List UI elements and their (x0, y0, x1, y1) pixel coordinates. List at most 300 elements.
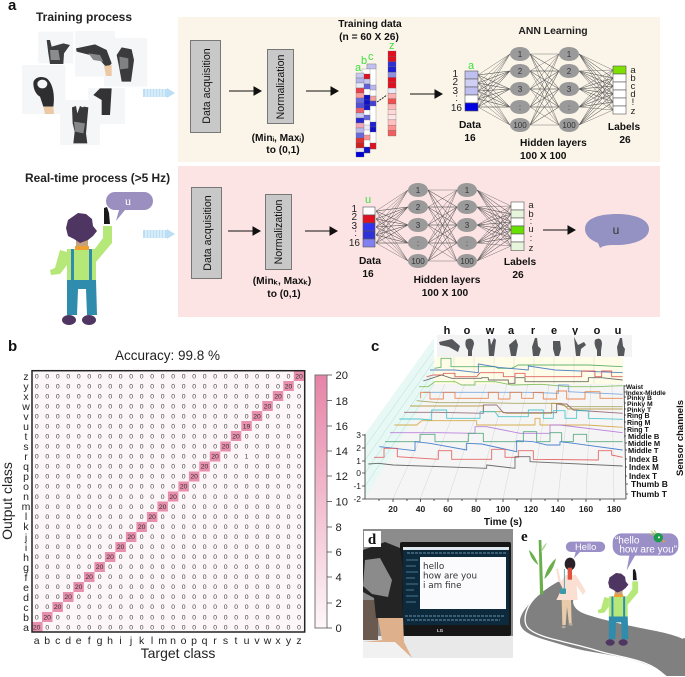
axis title: target class: Target class (141, 645, 215, 661)
x axis values (388, 504, 621, 514)
matrix diagonal values: 20 (222, 444, 229, 451)
output letters (528, 200, 534, 254)
heading: accuracy: Accuracy: 99.8 % (115, 348, 220, 363)
hidden layer nodes: : (519, 103, 521, 112)
matrix zero cells: 00 (35, 604, 56, 611)
output letters: ! (632, 97, 634, 108)
panel label d: d (368, 532, 377, 548)
matrix diagonal values: 20 (159, 504, 167, 511)
network connections (478, 54, 613, 125)
box: normalization (266, 194, 292, 270)
box: normalization (268, 50, 294, 124)
matrix zero cells: 00000000000000000000 (98, 574, 308, 581)
gesture letters: w (485, 325, 495, 337)
colour bar: 2 (336, 598, 342, 610)
output class letters: o (23, 481, 29, 493)
output class letters: i (25, 542, 27, 554)
sensor channel labels: Pinky M (627, 401, 653, 408)
speech bubble: hello (566, 542, 605, 558)
output letters: a (528, 200, 534, 211)
matrix zero cells: 000000000000000000000000 (35, 383, 287, 390)
input indices: 1 (452, 69, 458, 80)
chart axes (362, 385, 628, 502)
hidden layer nodes: 100 (411, 257, 425, 266)
screen text (423, 562, 477, 591)
screen text: how are you (423, 572, 477, 582)
matrix zero cells: 00000000000000 (35, 484, 182, 491)
x axis values: 80 (471, 504, 481, 514)
box: data acquisition (192, 188, 222, 278)
matrix frame (32, 371, 305, 632)
input indices: : (354, 228, 357, 239)
arrow: acquisition to normalization (228, 227, 260, 235)
colour bar: 6 (336, 547, 342, 559)
matrix zero cells: 00000000000000000000000 (66, 604, 308, 611)
matrix diagonal values: 20 (274, 393, 282, 400)
input letter a: a (468, 60, 475, 72)
heading: training data: Training data (338, 19, 402, 30)
matrix zero cells: 000 (276, 403, 308, 410)
output class letters: y (23, 381, 29, 393)
text: min max range: to (0,1) (266, 145, 300, 156)
output class letters (21, 371, 31, 634)
speech bubble: hello how are you (613, 533, 678, 570)
x axis values: 160 (579, 504, 593, 514)
output class letters: d (23, 592, 29, 604)
output class letters: z (23, 371, 29, 383)
matrix zero cells: 0000000 (35, 554, 108, 561)
output labels column (613, 66, 626, 114)
box: data acquisition (190, 40, 220, 132)
output class letters: r (24, 451, 28, 463)
matrix zero cells: 000000000000000 (150, 524, 308, 531)
speech bubble: hello how are you: how are you” (619, 544, 677, 555)
label: hidden layers: Hidden layers (414, 275, 481, 286)
matrix zero cells: 000000000000 (35, 504, 161, 511)
matrix diagonal values: 20 (43, 614, 51, 621)
chart walls and floor (365, 335, 632, 499)
output letters: b (528, 209, 534, 220)
matrix zero cells: 00000000000000000000000 (35, 393, 276, 400)
output class letters: k (23, 521, 29, 533)
y axis values: 2 (356, 443, 361, 453)
matrix zero cells: 0 (35, 614, 45, 621)
arrow: labels to output (543, 226, 575, 234)
x axis title: Time (s) (484, 517, 522, 528)
matrix zero cells: 000000000000000000 (119, 554, 308, 561)
colour bar: 8 (336, 522, 342, 534)
matrix diagonal values: 20 (33, 624, 41, 631)
input indices (451, 69, 462, 114)
y axis values (353, 430, 361, 504)
matrix zero cells: 00000000000000000 (35, 454, 213, 461)
sensor channel labels: Middle T (628, 446, 659, 455)
label: data 16: Data (359, 256, 381, 267)
screen text: i am fine (423, 581, 462, 591)
hidden layer nodes: 1 (567, 50, 572, 59)
road (520, 582, 685, 676)
matrix zero cells: 0000000000000000000 (35, 434, 234, 440)
matrix zero cells: 0000 (266, 414, 308, 420)
output labels column (511, 202, 524, 250)
output letters (630, 65, 636, 117)
matrix diagonal values: 20 (232, 434, 240, 440)
label: labels 26: Labels (608, 122, 640, 133)
colour bar: 10 (336, 496, 348, 508)
matrix diagonal values: 20 (295, 373, 303, 380)
text: min max range (252, 133, 304, 156)
matrix diagonal values (33, 373, 303, 631)
matrix zero cells: 0000000000000 (171, 504, 308, 511)
box: data acquisition: Data acquisition (202, 195, 214, 271)
text: min max range: to (0,1) (267, 289, 301, 300)
matrix zero cells: 000000 (35, 564, 98, 571)
gesture letters: o (464, 325, 471, 337)
matrix zero cells: 0000000000000000000000000 (45, 624, 308, 631)
input data column (363, 207, 375, 247)
arrow: realtime data flow (143, 229, 175, 239)
matrix zero cells: 00000 (255, 424, 308, 430)
panel: real-time pipeline (178, 166, 660, 317)
hidden layer nodes: : (568, 103, 570, 112)
hidden layer nodes: 2 (465, 203, 470, 212)
output class letters: w (21, 401, 30, 413)
x axis values: 100 (496, 504, 510, 514)
person with glove (598, 569, 638, 646)
hidden layer nodes: 3 (465, 221, 470, 230)
output class letters: v (23, 411, 29, 423)
matrix zero cells: 0000000000 (35, 524, 140, 531)
sensor channel labels: Waist (626, 384, 644, 391)
x axis values: 120 (524, 504, 538, 514)
matrix diagonal values: 20 (180, 484, 188, 491)
hidden layer nodes: : (466, 239, 468, 248)
input data column (465, 71, 478, 111)
output class letters: c (23, 602, 29, 614)
road and bamboo and woman (520, 530, 685, 676)
arrow: normalization to training data (306, 87, 338, 95)
hidden layer nodes (408, 183, 477, 268)
dotted connector (377, 95, 387, 102)
column letters a b c z (355, 40, 394, 74)
matrix diagonal values: 20 (169, 494, 177, 501)
output letters: c (631, 81, 636, 92)
sensor channel labels: Pinky B (627, 395, 652, 402)
matrix diagonal values: 20 (127, 534, 135, 541)
matrix zero cells: 0 (297, 383, 308, 390)
output class letters: t (25, 431, 28, 443)
colour bar: 18 (336, 396, 348, 408)
matrix diagonal values: 20 (138, 524, 146, 531)
matrix diagonal values: 20 (106, 554, 114, 561)
arrow: normalization to network (305, 227, 337, 235)
gesture letters: o (594, 325, 601, 337)
speech bubble: u (106, 192, 153, 221)
input indices (349, 204, 360, 249)
sensor channel labels: Index B (629, 455, 658, 464)
label: labels 26 (504, 257, 536, 281)
output letters: u (528, 224, 534, 235)
output class letters: q (23, 461, 29, 473)
panel e: street scene (520, 529, 685, 676)
input indices: : (455, 93, 458, 104)
sensor channel labels: Index-Middle (626, 390, 666, 397)
label: data 16: 16 (464, 133, 476, 144)
column letters a b c z: z (389, 40, 394, 52)
hidden layer nodes: 100 (513, 121, 527, 130)
box: data acquisition: Data acquisition (201, 48, 213, 124)
matrix zero cells: 00000000 (35, 544, 119, 551)
y axis values: 1 (356, 456, 361, 466)
output bubble: u (585, 214, 649, 248)
heading: real-time process: Real-time process (>5 Hz) (25, 171, 170, 185)
matrix diagonal values: 20 (64, 594, 72, 601)
confusion matrix (32, 371, 308, 632)
sensor channel labels: Index T (629, 472, 657, 481)
panel label d (364, 531, 381, 548)
matrix diagonal values: 20 (264, 403, 271, 410)
output class letters: l (25, 511, 27, 523)
matrix diagonal values: 20 (96, 564, 104, 571)
matrix zero cells: 00000000000000000000 (35, 424, 245, 430)
panel d: laptop photo (363, 529, 513, 658)
woman (556, 558, 586, 628)
label: data 16 (359, 256, 381, 280)
heading: training data: (n = 60 X 26) (339, 32, 399, 43)
x axis values: 20 (388, 504, 398, 514)
text: min max range: (Minᵢ, Maxᵢ) (252, 133, 304, 144)
panel label b: b (8, 338, 17, 355)
label: hidden layers (414, 275, 481, 299)
heading: training process: Training process (36, 10, 132, 24)
sensor channel labels: Ring T (627, 427, 649, 434)
speech bubble: hello: Hello (575, 542, 596, 552)
gesture letters: y (572, 325, 579, 337)
matrix zero cells: 0000000000000000000000 (35, 403, 266, 410)
matrix zero cells: 000000000000000000 (35, 444, 224, 451)
matrix diagonal values: 20 (285, 383, 292, 390)
heading: ANN learning: ANN Learning (518, 26, 588, 37)
bamboo (529, 540, 556, 594)
output bubble: u: u (613, 223, 619, 237)
gesture photo icons (439, 337, 625, 356)
label: data 16: 16 (362, 269, 374, 280)
matrix zero cells: 00000000000000000 (129, 544, 308, 551)
x axis values: 180 (607, 504, 621, 514)
output letters: z (529, 243, 534, 254)
gesture letters: r (531, 325, 536, 337)
photo collage: glove gestures (22, 31, 147, 145)
hidden layer nodes: 3 (567, 85, 572, 94)
hidden layer nodes: 100 (460, 257, 474, 266)
hidden layer nodes: 1 (518, 50, 523, 59)
matrix zero cells: 00 (287, 393, 308, 400)
matrix zero cells (35, 373, 308, 631)
sensor channel labels (626, 384, 668, 499)
y axis values: -2 (353, 494, 361, 504)
laptop (363, 542, 513, 658)
label: labels 26: 26 (512, 270, 524, 281)
input indices: 3 (351, 221, 357, 232)
output letters: : (530, 216, 532, 227)
sensor channel labels: Middle B (628, 432, 660, 441)
output class letters: e (23, 582, 29, 594)
label: data 16 (459, 120, 481, 144)
hidden layer nodes: 2 (567, 67, 572, 76)
matrix diagonal cells (32, 371, 304, 632)
output letters: d (630, 89, 636, 100)
output class letters: p (23, 471, 29, 483)
matrix diagonal values: 20 (253, 414, 261, 420)
arrow: training data to ANN (410, 90, 442, 98)
matrix zero cells: 00000000000 (35, 514, 150, 521)
hidden layer nodes (510, 47, 579, 132)
icon: sound bird (649, 530, 666, 542)
label: data 16: Data (459, 120, 481, 131)
output letters: z (631, 106, 636, 117)
colour bar: 4 (336, 572, 342, 584)
output letters: : (530, 233, 532, 244)
matrix zero cells: 0000000000000000000000 (77, 594, 308, 601)
person with glove (50, 207, 112, 325)
matrix zero cells: 000000000 (35, 534, 129, 541)
gesture letters: u (615, 325, 621, 337)
sensor channel labels: Pinky T (627, 407, 652, 414)
hidden layer nodes: 3 (416, 221, 421, 230)
colour bar: 16 (336, 421, 348, 433)
hidden layer nodes: 2 (518, 67, 523, 76)
matrix diagonal values: 20 (148, 514, 156, 521)
panel: training pipeline (178, 17, 660, 162)
target class letters: abcdefghijklmnopqrstuvwxyz (34, 635, 302, 647)
output class letters: a (23, 622, 29, 634)
matrix zero cells: 0000000000000000 (140, 534, 308, 541)
hidden layer nodes: 100 (562, 121, 576, 130)
matrix zero cells: 0000000000000000 (35, 464, 203, 471)
output class letters: b (23, 612, 29, 624)
label: hidden layers (520, 138, 587, 162)
arrow: acquisition to normalization (229, 87, 261, 95)
sensor channel labels: Thumb T (631, 489, 668, 499)
column letters a b c z: a (355, 62, 362, 74)
3D sensor chart (353, 335, 685, 528)
matrix zero cells: 000 (35, 594, 66, 601)
label: labels 26: Labels (504, 257, 536, 268)
panel label e: e (521, 529, 528, 545)
sensor traces (368, 358, 623, 468)
colour bar (315, 370, 348, 635)
x axis values: 60 (443, 504, 453, 514)
y axis values: 3 (356, 430, 361, 440)
output class letters: u (23, 421, 29, 433)
matrix zero cells: 0000000 (234, 444, 308, 451)
hidden layer nodes: 2 (416, 203, 421, 212)
label: hidden layers: Hidden layers (520, 138, 587, 149)
matrix zero cells: 000000000000000000000000 (56, 614, 308, 621)
output class letters: s (23, 441, 29, 453)
hidden layer nodes: : (417, 239, 419, 248)
matrix zero cells: 0000000000000 (35, 494, 171, 501)
column letters a b c z: c (368, 51, 374, 63)
matrix diagonal values: 19 (243, 424, 250, 430)
y axis values: -1 (353, 481, 361, 491)
sensor channel labels: Thumb B (631, 479, 668, 489)
output class letters: j (24, 532, 27, 544)
matrix diagonal values: 20 (85, 574, 93, 581)
colour bar: 0 (336, 623, 342, 635)
matrix zero cells: 00100000 (224, 454, 308, 461)
box: normalization: Normalization (275, 55, 287, 119)
matrix diagonal values: 20 (190, 474, 198, 481)
output class letters: g (23, 562, 29, 574)
input indices: 2 (452, 77, 458, 88)
text: min max range (253, 276, 311, 300)
matrix zero cells: 00000 (35, 574, 87, 581)
box: normalization: Normalization (273, 200, 285, 264)
gloved hand (363, 542, 412, 658)
sensor channel labels: Index M (629, 463, 659, 472)
x axis values: 40 (416, 504, 425, 514)
input indices: 16 (451, 103, 462, 114)
text: min max range: (Minₖ, Maxₖ) (253, 276, 311, 287)
input letter u: u (365, 194, 371, 206)
speech bubble: u: u (125, 194, 131, 208)
matrix zero cells: 000000000 (213, 464, 308, 471)
hidden layer nodes: 1 (465, 186, 470, 195)
matrix zero cells: 000000000000000000000 (87, 584, 308, 591)
input indices: 16 (349, 238, 360, 249)
input indices: 1 (351, 204, 357, 215)
label: labels 26: 26 (619, 135, 631, 146)
input indices: 3 (452, 86, 458, 97)
matrix zero cells: 0000 (35, 584, 77, 591)
sensor channel labels: Ring M (627, 420, 650, 427)
input indices: 2 (351, 212, 357, 223)
colour bar: 12 (336, 471, 348, 483)
data columns c and b and a (356, 64, 376, 157)
output letters: b (630, 73, 636, 84)
output class letters: h (23, 552, 29, 564)
label: labels 26 (608, 122, 640, 146)
x axis values: 140 (551, 504, 565, 514)
output class letters: x (23, 391, 29, 403)
matrix diagonal values: 20 (117, 544, 125, 551)
output class letters: m (22, 501, 31, 513)
colour bar: 20 (336, 370, 348, 382)
matrix zero cells: 0000000000000000000000000 (35, 373, 297, 380)
panel label c: c (371, 338, 379, 355)
label: hidden layers: 100 X 100 (422, 288, 469, 299)
sensor channel labels: Ring B (627, 413, 650, 420)
matrix diagonal values: 20 (201, 464, 208, 471)
matrix diagonal values: 20 (54, 604, 62, 611)
output class letters: n (23, 491, 29, 503)
gesture letters: h (444, 325, 451, 337)
gesture letters: e (551, 325, 557, 337)
y axis values: 0 (356, 468, 361, 478)
label: hidden layers: 100 X 100 (520, 151, 567, 162)
data column z (388, 51, 396, 136)
hidden layer nodes: 3 (518, 85, 523, 94)
matrix zero cells: 000000000000000 (35, 474, 192, 481)
colour bar: 14 (336, 446, 348, 458)
screen text: hello (423, 562, 444, 572)
matrix zero cells: 000000 (245, 434, 308, 440)
gesture letters: a (508, 325, 515, 337)
matrix zero cells: 0000000000 (203, 474, 308, 481)
arrow: training data flow (143, 88, 175, 98)
output class letters: f (25, 572, 28, 584)
